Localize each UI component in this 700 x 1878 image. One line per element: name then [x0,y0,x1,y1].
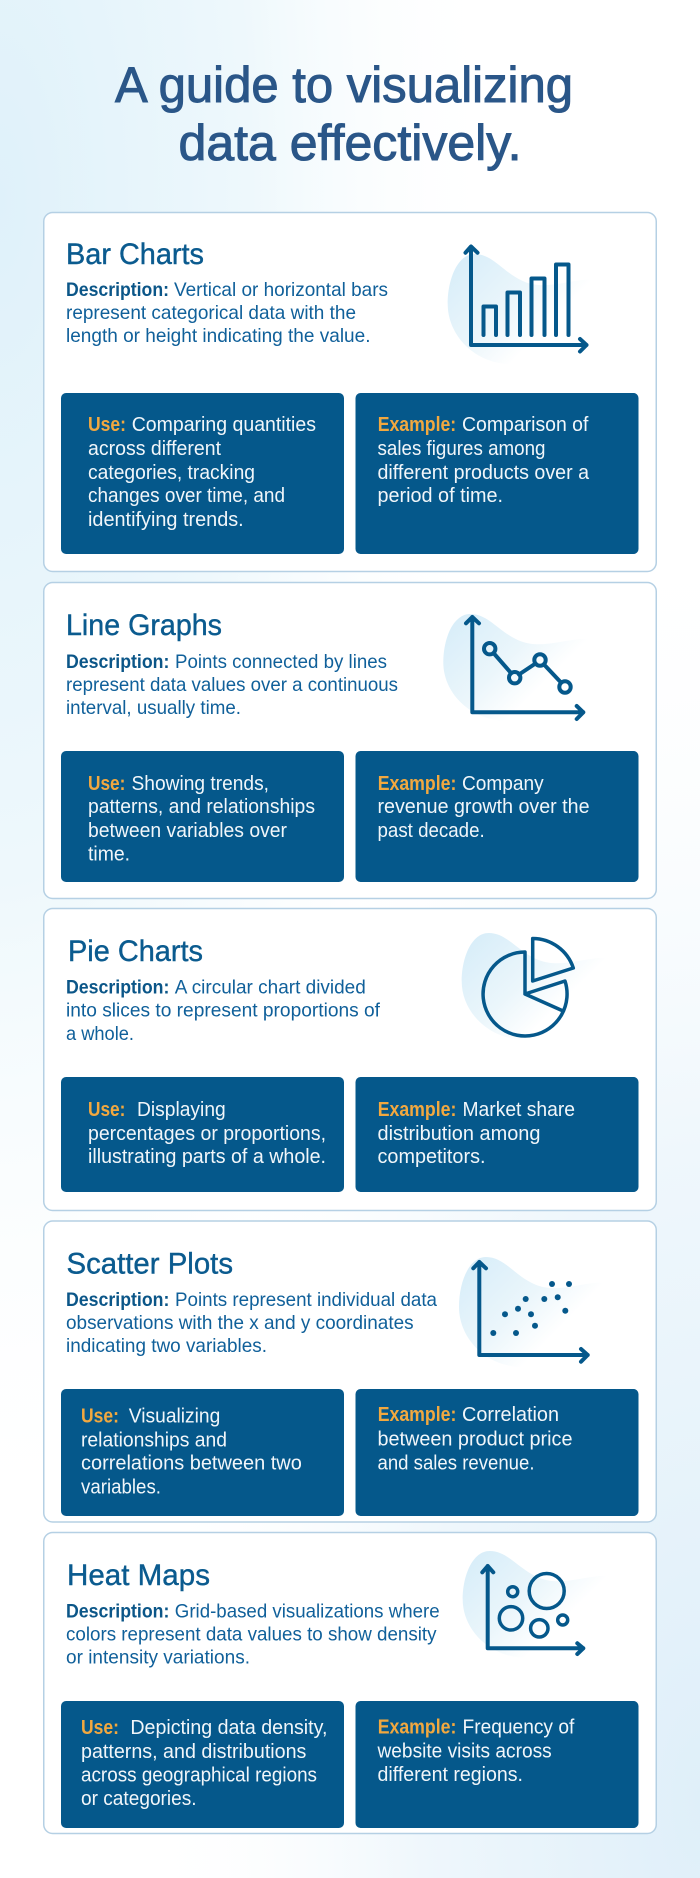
description: bar charts: Description: [66,279,169,301]
example box: scatter plots: Correlation [462,1404,559,1426]
description: scatter plots: observations with the x and y coordinates [66,1312,414,1334]
use box: pie charts: percentages or proportions, [88,1123,326,1145]
use box: line graphs: Showing trends, [132,773,269,795]
use box: pie charts: illustrating parts of a whole. [88,1146,326,1168]
description: line graphs: Description: [66,651,169,673]
use box: bar charts: across different [88,438,221,460]
use box: heat maps: Use: [81,1717,119,1739]
icon: scatter plot [459,1257,621,1367]
heading: bar charts: Bar Charts [66,238,204,271]
example box: scatter plots: Example: [378,1404,456,1426]
description: heat maps: Description: [66,1601,169,1623]
description: pie charts: into slices to represent proportions of [66,1000,381,1022]
example box: line graphs: Company [462,773,544,795]
description: scatter plots: Points represent individual data [175,1289,437,1311]
use box: pie charts: Use: [88,1099,125,1121]
title [115,57,573,171]
example box: bar charts: Example: [378,414,456,436]
description: scatter plots: Description: [66,1289,169,1311]
example box: heat maps: website visits across [377,1741,552,1763]
use box: line graphs: between variables over [88,820,287,842]
use box: scatter plots: Use: [81,1405,119,1427]
example box: heat maps: Example: [378,1717,456,1739]
example box: pie charts: Example: [378,1099,456,1121]
description: bar charts: represent categorical data with the [66,302,356,324]
title: data effectively. [178,115,522,171]
use box: bar charts: categories, tracking [88,462,255,484]
icon: bar chart [448,246,610,364]
description: bar charts: Vertical or horizontal bars [174,279,388,301]
example box: heat maps [356,1701,638,1828]
example box: line graphs [356,751,638,882]
description: bar charts [66,279,388,347]
use box: bar charts: identifying trends. [88,509,244,531]
example box: bar charts [356,393,638,554]
description: bar charts: length or height indicating the value. [66,325,370,347]
description: heat maps: or intensity variations. [66,1647,250,1669]
description: heat maps: colors represent data values to show density [66,1624,437,1646]
panel: scatter plots [44,1221,656,1522]
description: scatter plots [66,1289,437,1357]
description: heat maps [66,1601,440,1669]
use box: scatter plots [61,1389,344,1516]
use box: scatter plots: correlations between two [81,1452,302,1474]
example box: bar charts: sales figures among [378,438,546,460]
example box: scatter plots: and sales revenue. [378,1452,534,1474]
example box: pie charts: Market share [462,1099,575,1121]
use box: line graphs: patterns, and relationships [88,796,315,818]
example box: pie charts [356,1077,638,1192]
panel: bar charts [44,212,656,572]
icon: pie chart [462,933,624,1040]
description: pie charts: A circular chart divided [175,977,366,999]
example box: bar charts: period of time. [378,485,503,507]
description: line graphs: represent data values over a continuous [66,674,398,696]
use box: line graphs: Use: [88,773,125,795]
heading: line graphs: Line Graphs [66,609,222,642]
heading: pie charts: Pie Charts [68,935,203,968]
description: scatter plots: indicating two variables. [66,1335,267,1357]
example box: heat maps: Frequency of [462,1717,575,1739]
use box: bar charts: changes over time, and [88,485,285,507]
panel: line graphs [44,582,656,898]
description: line graphs: Points connected by lines [175,651,387,673]
description: line graphs [66,651,398,719]
example box: heat maps: different regions. [378,1764,523,1786]
example box: scatter plots [356,1389,638,1516]
heading: heat maps: Heat Maps [67,1559,210,1592]
icon: heat map [463,1551,625,1658]
example box: scatter plots: between product price [378,1428,572,1450]
panel: pie charts [44,908,656,1210]
use box: pie charts [61,1077,344,1192]
example box: pie charts: competitors. [378,1146,486,1168]
example box: line graphs: Example: [378,773,456,795]
example box: bar charts: different products over a [378,462,590,484]
use box: scatter plots: Visualizing [129,1405,220,1427]
use box: heat maps [61,1701,344,1828]
use box: heat maps: across geographical regions [81,1764,317,1786]
description: heat maps: Grid-based visualizations where [175,1601,440,1623]
use box: line graphs: time. [88,844,130,866]
use box: heat maps: or categories. [81,1788,197,1810]
example box: pie charts: distribution among [378,1123,540,1145]
description: pie charts: Description: [66,977,169,999]
use box: bar charts: Use: [88,414,126,436]
use box: heat maps: patterns, and distributions [81,1741,306,1763]
use box: scatter plots: relationships and [81,1429,227,1451]
heading: scatter plots: Scatter Plots [66,1247,233,1280]
use box: pie charts: Displaying [137,1099,226,1121]
example box: bar charts: Comparison of [462,414,589,436]
use box: scatter plots: variables. [81,1476,161,1498]
use box: bar charts: Comparing quantities [132,414,316,436]
description: line graphs: interval, usually time. [66,697,241,719]
title: A guide to visualizing [115,57,573,113]
description: pie charts: a whole. [66,1023,134,1045]
use box: line graphs [61,751,344,882]
example box: line graphs: past decade. [378,820,485,842]
use box: heat maps: Depicting data density, [130,1717,327,1739]
icon: line graph [443,614,605,721]
description: pie charts [66,977,381,1045]
example box: line graphs: revenue growth over the [378,796,590,818]
use box: bar charts [61,393,344,554]
panel: heat maps [44,1532,656,1834]
